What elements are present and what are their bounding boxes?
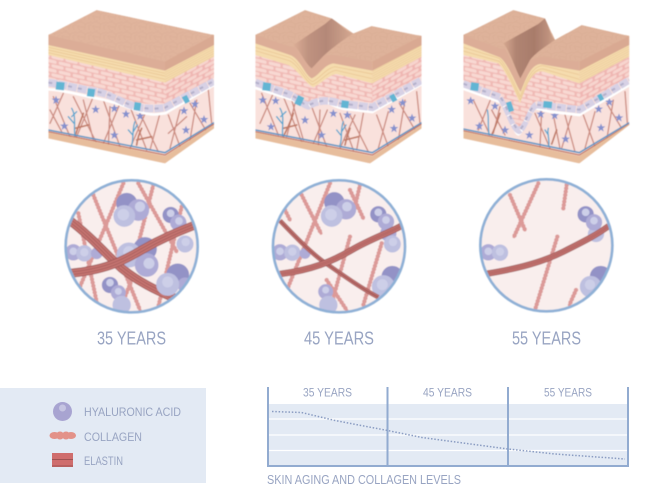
panel: legend [0,388,206,483]
magnified circle: 55 years [480,179,612,311]
magnified circle: 35 years [66,180,198,313]
age label: 55 years: 55 YEARS [512,328,581,348]
elastin bands [280,221,401,297]
elastin band [485,226,609,274]
icon: elastin strip [52,453,73,467]
hyaluronic acid spheres [481,207,611,297]
wrinkle valley [293,18,353,68]
skin block: 45 years [255,10,422,167]
chart: collagen levels by age [268,386,628,466]
column label: 55 years: 55 YEARS [544,386,592,400]
age label: 45 years: 45 YEARS [304,328,374,348]
wrinkle valley [503,18,555,78]
icon: hyaluronic acid sphere [53,402,72,421]
legend label: hyaluronic acid: HYALURONIC ACID [84,405,181,419]
collagen fibers [78,183,182,313]
chart caption: SKIN AGING AND COLLAGEN LEVELS [267,472,461,487]
legend label: collagen: COLLAGEN [84,430,142,444]
collagen fibers [285,183,382,310]
column label: 45 years: 45 YEARS [423,386,472,400]
collagen level dotted line [272,412,625,459]
legend label: elastin: ELASTIN [84,454,123,468]
magnified circle: 45 years [273,180,405,313]
skin block: 35 years [48,10,214,167]
skin block: 55 years [463,10,629,167]
elastin bands [68,219,195,298]
hyaluronic acid spheres [273,193,402,313]
age label: 35 years: 35 YEARS [97,328,166,348]
icon: collagen beads [50,432,76,440]
collagen fibers [510,183,576,310]
hyaluronic acid spheres [66,194,193,313]
column label: 35 years: 35 YEARS [303,386,352,400]
